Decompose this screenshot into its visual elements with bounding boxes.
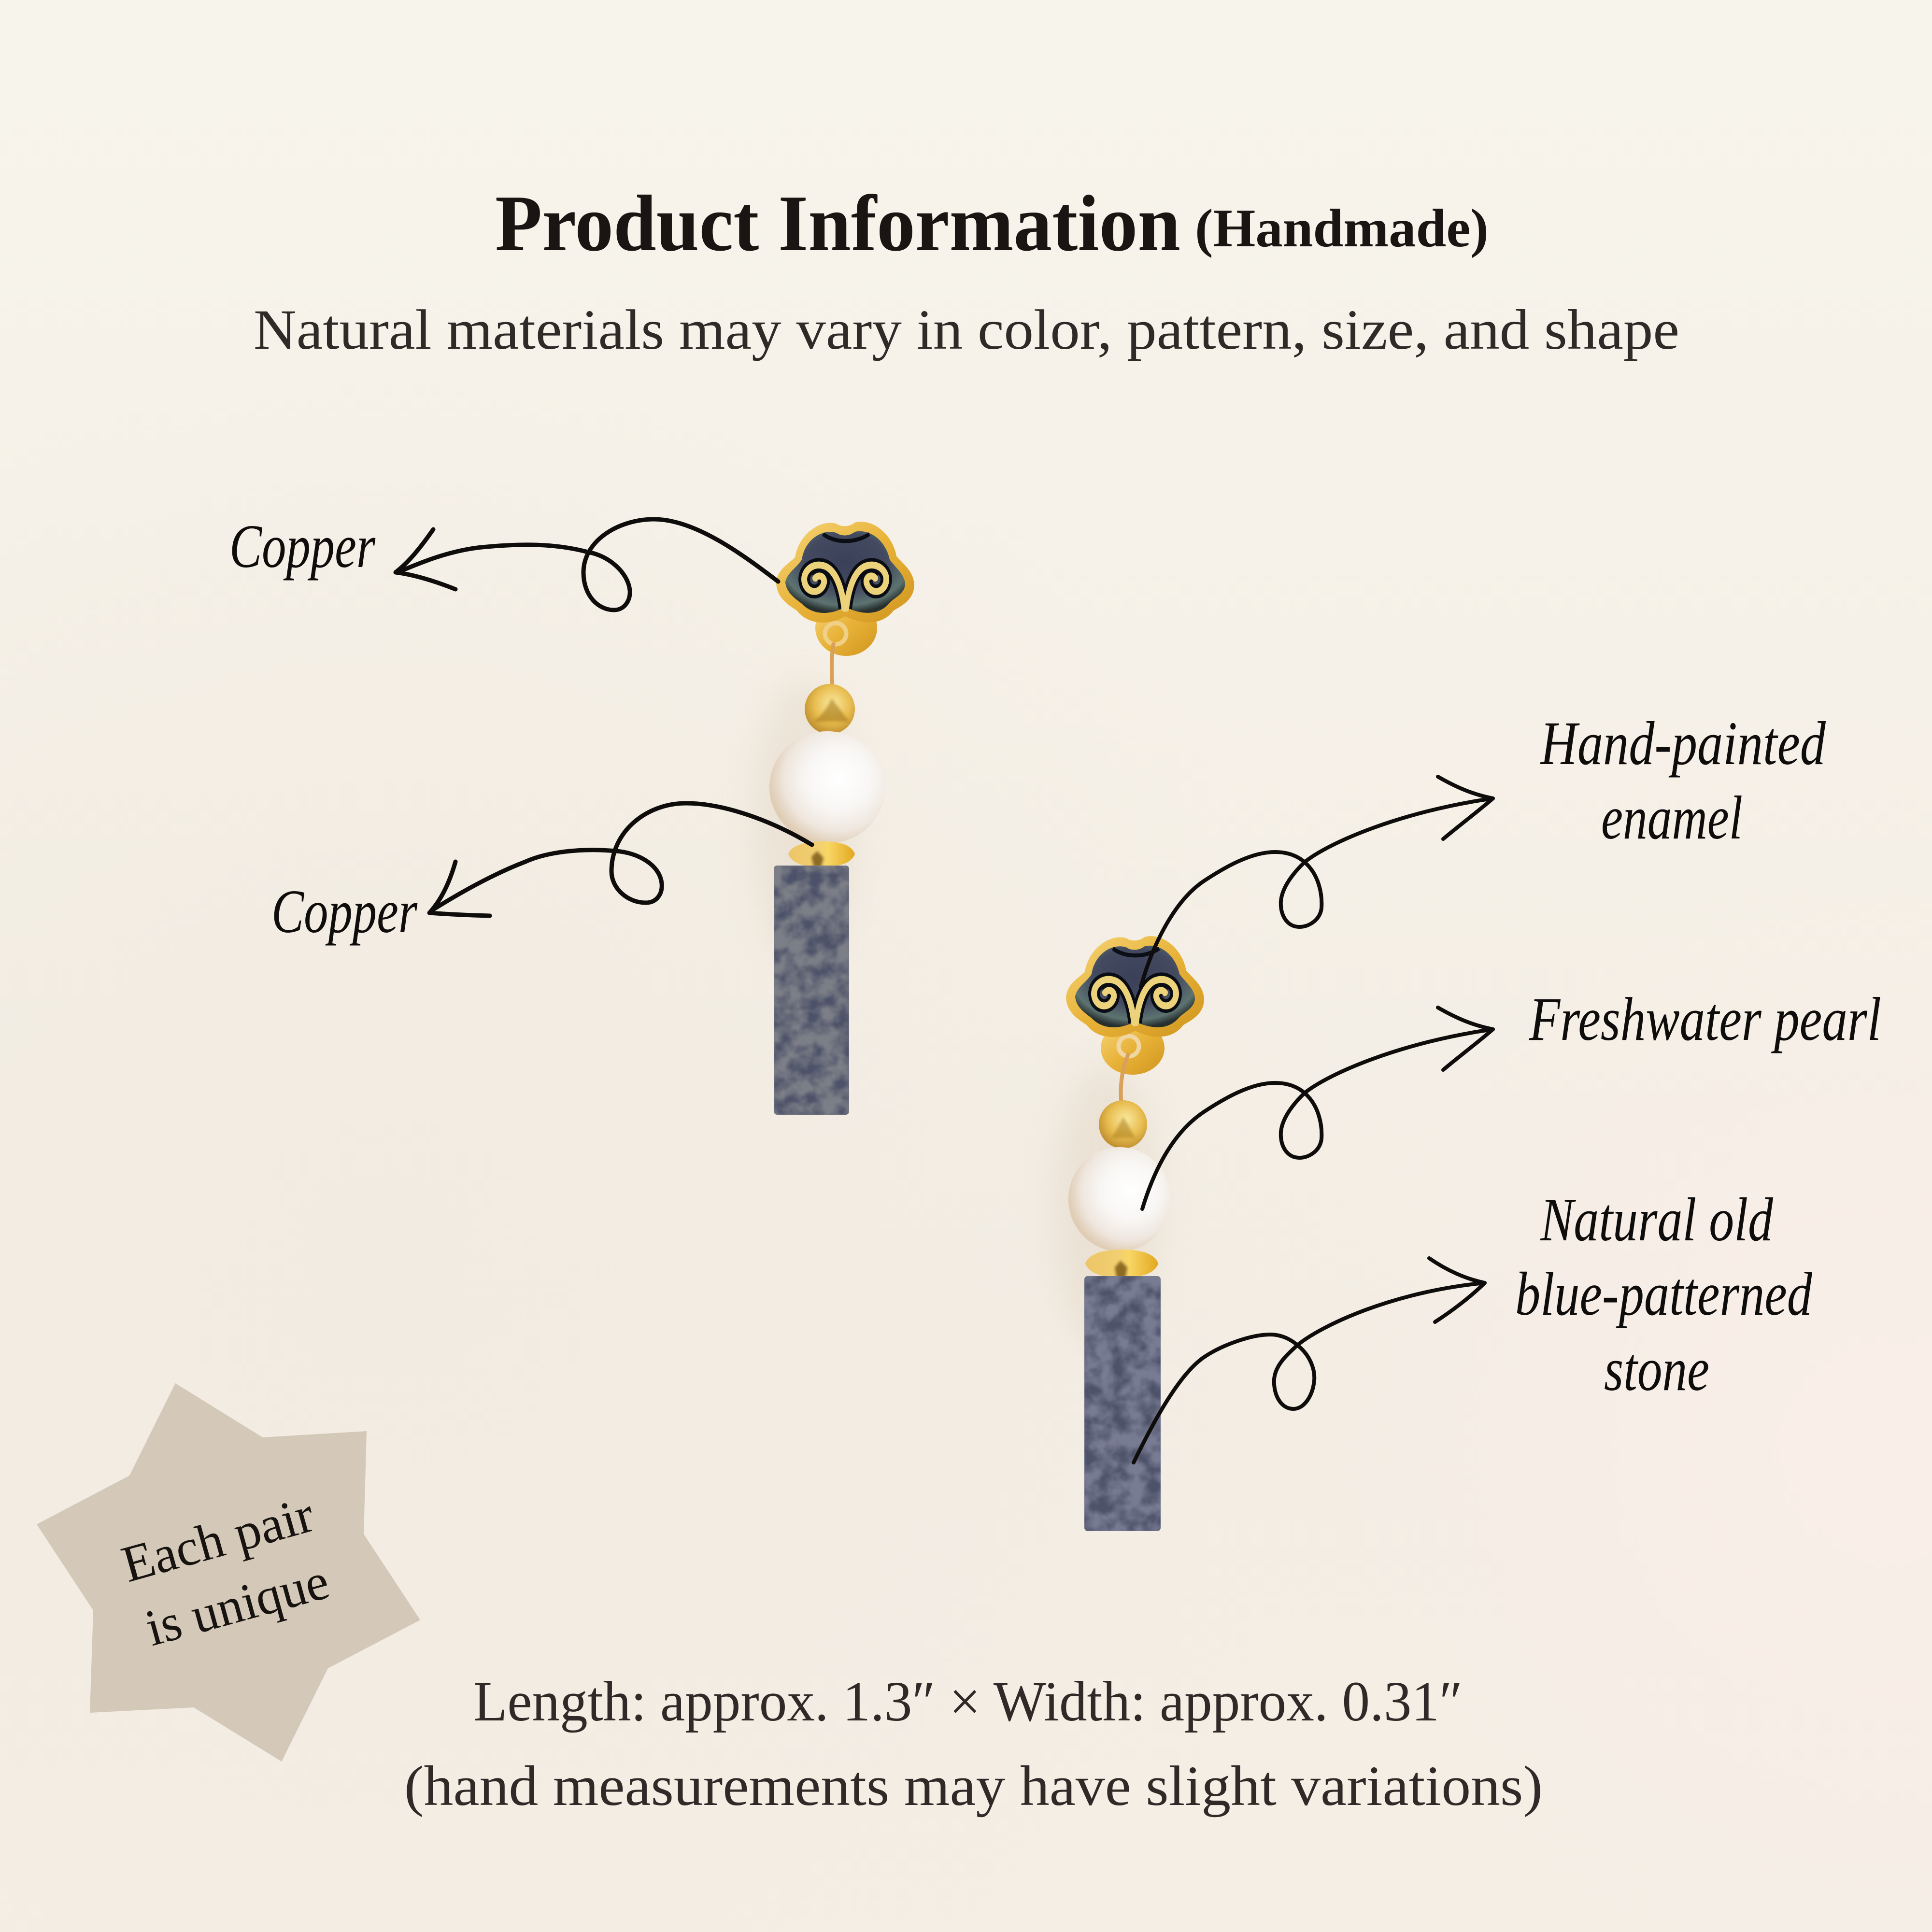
- gold bead: [805, 684, 855, 734]
- label: copper top: Copper: [229, 512, 376, 581]
- arrow: pearl: [1142, 1008, 1493, 1209]
- post and neck: [1101, 1022, 1165, 1106]
- earring: right: [1053, 936, 1204, 1531]
- title: Product Information: [495, 179, 1180, 268]
- cloud stud: [776, 522, 914, 623]
- post and neck: [815, 600, 877, 692]
- badge text: Each pair: [116, 1486, 320, 1593]
- label: hand-painted enamel: [1539, 709, 1826, 852]
- arrow: stone: [1134, 1258, 1485, 1463]
- pearl: [769, 731, 885, 843]
- label: natural old blue-patterned stone: Natural old: [1540, 1185, 1774, 1254]
- pearl: [1068, 1147, 1171, 1251]
- arrow: lower copper: [429, 803, 812, 916]
- stone bar: [774, 866, 849, 1115]
- subtitle: Natural materials may vary in color, pattern, size, and shape: [254, 298, 1679, 361]
- dimensions text: Length: approx. 1.3″ × Width: approx. 0.31″: [473, 1670, 1463, 1733]
- label: natural old blue-patterned stone: blue-patterned: [1515, 1260, 1813, 1328]
- arrow: top copper: [396, 519, 778, 610]
- cloud stud: [1066, 936, 1204, 1037]
- earring shadow: [751, 676, 857, 966]
- earring: left: [751, 522, 914, 1115]
- label: hand-painted enamel: Hand-painted: [1539, 709, 1826, 778]
- label: copper lower: Copper: [271, 877, 418, 946]
- earring shadow: [1053, 1063, 1159, 1352]
- dimensions text: [404, 1670, 1543, 1818]
- arrow: enamel: [1141, 777, 1493, 987]
- label: natural old blue-patterned stone: [1515, 1185, 1813, 1404]
- star shape: [37, 1383, 420, 1762]
- badge: each pair is unique: [37, 1383, 420, 1762]
- label: natural old blue-patterned stone: stone: [1604, 1335, 1709, 1404]
- title: (Handmade): [1195, 199, 1489, 258]
- gold rondelle: [1085, 1250, 1158, 1278]
- dimensions text: (hand measurements may have slight variations): [404, 1754, 1543, 1818]
- gold bead: [1099, 1100, 1147, 1149]
- label: hand-painted enamel: enamel: [1601, 783, 1743, 852]
- badge text: [116, 1486, 335, 1657]
- stone bar: [1084, 1276, 1161, 1531]
- badge text: is unique: [140, 1553, 335, 1657]
- gold rondelle: [788, 841, 855, 867]
